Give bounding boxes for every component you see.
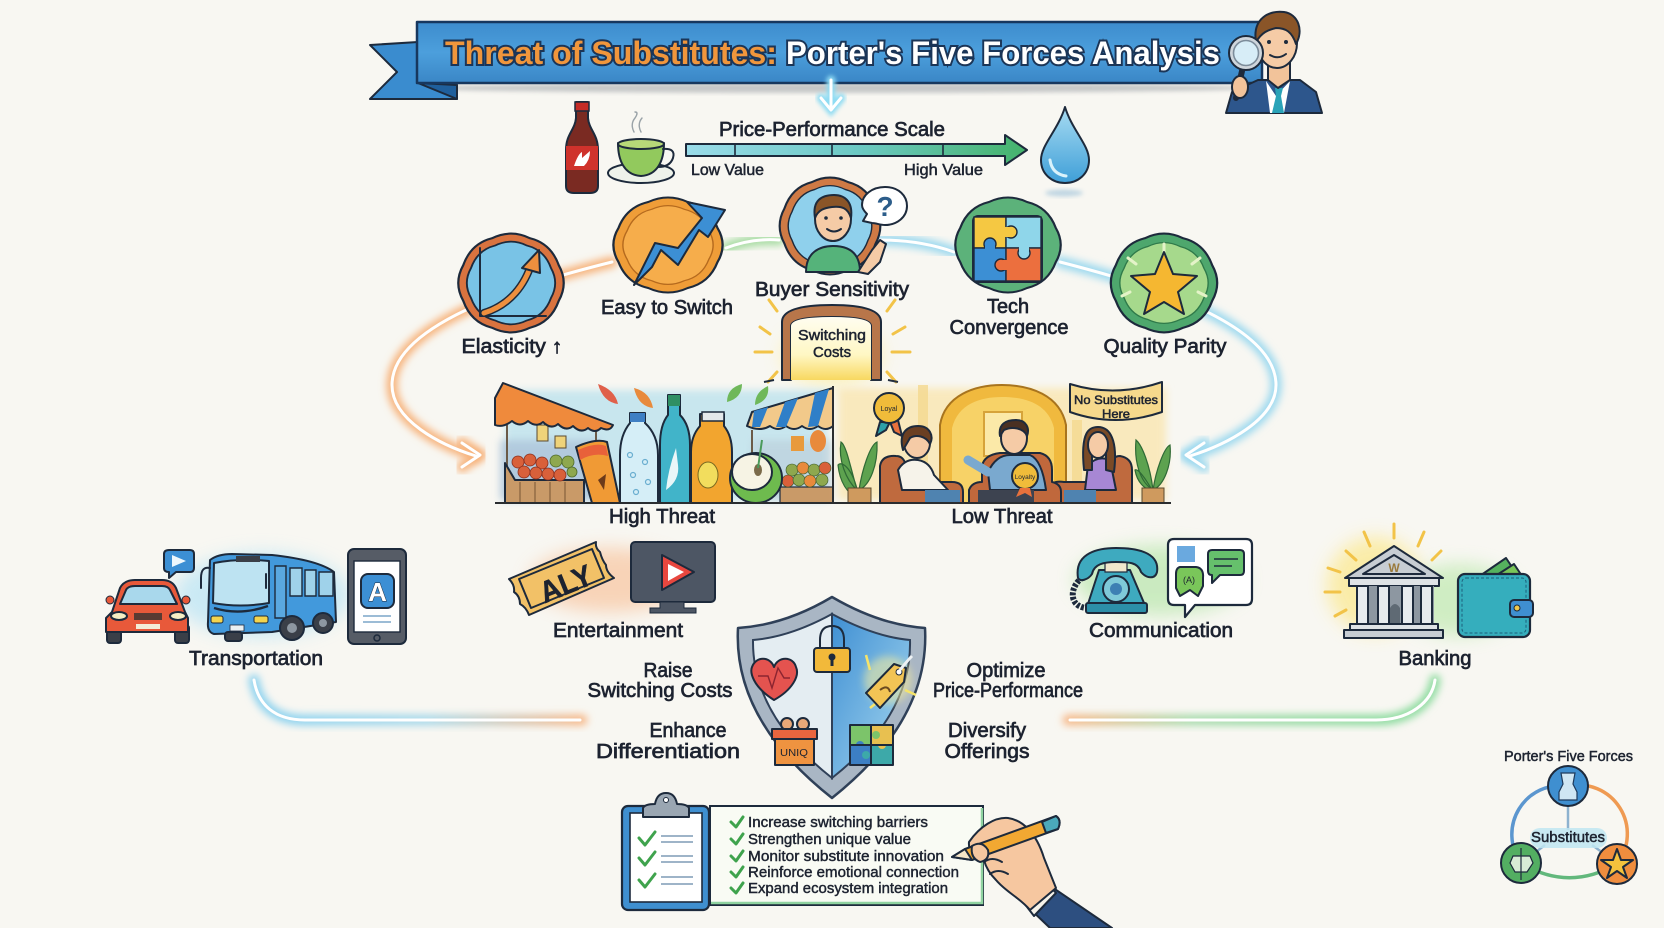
label: Banking xyxy=(1398,648,1472,670)
icon: buyer badge xyxy=(780,178,907,274)
arrow: banner to scale xyxy=(821,80,841,110)
icon: car xyxy=(106,580,190,643)
icon: gift box xyxy=(772,718,817,765)
coconut xyxy=(730,440,782,503)
icon: clipboard xyxy=(622,793,709,910)
checklist items: Reinforce emotional connection xyxy=(748,864,959,881)
strategy: diversify offerings: Offerings xyxy=(944,741,1030,763)
category: entertainment xyxy=(509,542,715,642)
factor: buyer sensitivity xyxy=(755,178,909,301)
label: low threat: Low Threat xyxy=(952,506,1053,528)
icon: bus xyxy=(201,554,336,641)
strategy: optimize price-performance: Optimize xyxy=(966,660,1046,682)
factor: elasticity xyxy=(458,234,564,358)
scale heading: Price-Performance Scale xyxy=(719,119,945,141)
force ring xyxy=(1512,785,1627,878)
label: Convergence xyxy=(950,317,1068,339)
node: left xyxy=(1501,843,1541,883)
label: Quality Parity xyxy=(1104,336,1226,358)
checklist items: Monitor substitute innovation xyxy=(748,848,944,865)
icon: bank building: W xyxy=(1388,561,1400,575)
icon: price tag xyxy=(864,655,916,708)
icon: switching costs doorway xyxy=(755,300,910,385)
icon: ticket: ALY xyxy=(535,559,597,610)
icon: phone xyxy=(348,549,406,644)
label: Buyer Sensitivity xyxy=(755,279,909,301)
icon: rotary telephone xyxy=(1073,548,1157,613)
factor: easy to switch xyxy=(601,198,733,319)
icon: easy to switch badge xyxy=(613,198,725,292)
plant left xyxy=(838,442,877,503)
title banner xyxy=(370,22,1262,99)
checklist items: Expand ecosystem integration xyxy=(748,880,948,897)
strategy: optimize price-performance: Price-Performance xyxy=(933,680,1083,702)
icon: ticket xyxy=(509,542,614,615)
icon: wallet xyxy=(1458,558,1533,637)
icon: chat bubble xyxy=(164,550,194,578)
right stall xyxy=(747,388,833,503)
icon: chat panel xyxy=(1168,539,1252,617)
door text: Switching xyxy=(798,327,866,344)
icon: puzzle badge xyxy=(955,198,1061,292)
category: banking xyxy=(1325,524,1533,670)
award ribbon xyxy=(874,393,904,436)
icon: video screen xyxy=(631,542,715,613)
strategy: raise switching costs xyxy=(588,660,732,702)
icon: chat panel: (A) xyxy=(1183,575,1195,585)
factor: tech convergence xyxy=(950,198,1068,339)
teal bottle xyxy=(660,395,690,503)
label: Tech xyxy=(987,296,1029,318)
water bottle xyxy=(620,413,658,503)
node: top xyxy=(1548,766,1588,806)
icon: cola bottle xyxy=(566,102,598,193)
scale arrow xyxy=(686,135,1027,165)
golden arch xyxy=(940,385,1066,503)
category: transportation xyxy=(106,549,406,670)
label xyxy=(950,296,1068,339)
center person with medal: Loyalty xyxy=(1015,474,1036,481)
low value label: Low Value xyxy=(691,162,764,179)
label: high threat: High Threat xyxy=(609,506,715,528)
award ribbon: Loyal xyxy=(881,406,898,413)
strategy: raise switching costs: Raise xyxy=(644,660,692,682)
strategy: enhance differentiation: Differentiation xyxy=(596,741,740,763)
right person on armchair xyxy=(1049,427,1132,503)
title text: Threat of Substitutes: xyxy=(445,35,777,71)
icon: shield puzzle xyxy=(850,725,893,765)
strategy: diversify offerings: Diversify xyxy=(948,720,1026,742)
high value label: High Value xyxy=(904,162,983,179)
icon: hand writing with pen xyxy=(952,816,1112,928)
strategy: diversify offerings xyxy=(944,720,1030,763)
center person with medal xyxy=(968,420,1061,503)
banner body xyxy=(417,22,1262,83)
scene: low threat lounge xyxy=(838,382,1170,503)
speech bubble: ? xyxy=(876,191,894,222)
flow arc: factors to threat levels xyxy=(392,240,1276,467)
factor: quality parity xyxy=(1104,234,1226,358)
connector: banking to shield xyxy=(1068,680,1435,720)
no substitutes sign xyxy=(1070,382,1162,421)
scene divider and ground line xyxy=(495,386,1171,503)
checklist items: Increase switching barriers xyxy=(748,814,928,831)
icon: star badge xyxy=(1111,234,1217,332)
checklist items xyxy=(731,814,959,897)
strategy: raise switching costs: Switching Costs xyxy=(588,680,732,702)
label: Entertainment xyxy=(553,620,683,642)
icon: green tea cup xyxy=(608,112,674,183)
orange can xyxy=(576,441,620,503)
door text xyxy=(798,327,866,361)
label: Easy to Switch xyxy=(601,297,733,319)
no substitutes sign: Here xyxy=(1102,407,1130,421)
label: Transportation xyxy=(189,648,323,670)
juice bottle xyxy=(691,412,732,503)
title text: Porter's Five Forces Analysis xyxy=(786,35,1220,71)
label: Elasticity ↑ xyxy=(462,336,562,358)
icon: water drop xyxy=(1041,107,1089,196)
left person on armchair xyxy=(880,426,963,503)
checklist items: Strengthen unique value xyxy=(748,831,911,848)
panel: threat illustration xyxy=(495,382,1171,503)
connector: transportation to shield xyxy=(254,680,582,720)
node: right xyxy=(1597,844,1637,884)
scene: high threat market xyxy=(495,383,833,503)
banner ribbon tail xyxy=(370,42,457,99)
title text xyxy=(445,35,1220,71)
icon: bank building xyxy=(1344,546,1443,638)
icon: heart xyxy=(751,659,797,700)
icon: padlock xyxy=(814,626,850,672)
panel: action checklist xyxy=(622,793,983,910)
mini diagram title: Porter's Five Forces xyxy=(1504,748,1633,765)
icon: phone: A xyxy=(368,577,387,607)
strategy: optimize price-performance xyxy=(933,660,1083,702)
market stall left xyxy=(495,383,613,503)
icon: sun rays xyxy=(1325,524,1441,616)
strategy: enhance differentiation: Enhance xyxy=(650,720,726,742)
no substitutes sign: No Substitutes xyxy=(1074,393,1158,407)
falling leaves xyxy=(598,384,768,408)
plant right xyxy=(1135,440,1170,503)
price-performance scale xyxy=(686,119,1027,179)
strategy: enhance differentiation xyxy=(596,720,740,763)
icon: elasticity badge xyxy=(458,234,564,332)
door text: Costs xyxy=(813,344,851,361)
icon: analyst with magnifying glass xyxy=(1226,12,1322,113)
mini diagram: Porter's five forces xyxy=(1501,748,1637,884)
icon: gift box: UNIQ xyxy=(780,748,808,759)
category: communication xyxy=(1073,539,1252,642)
substitutes pill: Substitutes xyxy=(1531,829,1605,846)
checklist panel xyxy=(710,806,983,905)
label: Communication xyxy=(1089,620,1233,642)
shield with strategy icons xyxy=(738,597,925,798)
